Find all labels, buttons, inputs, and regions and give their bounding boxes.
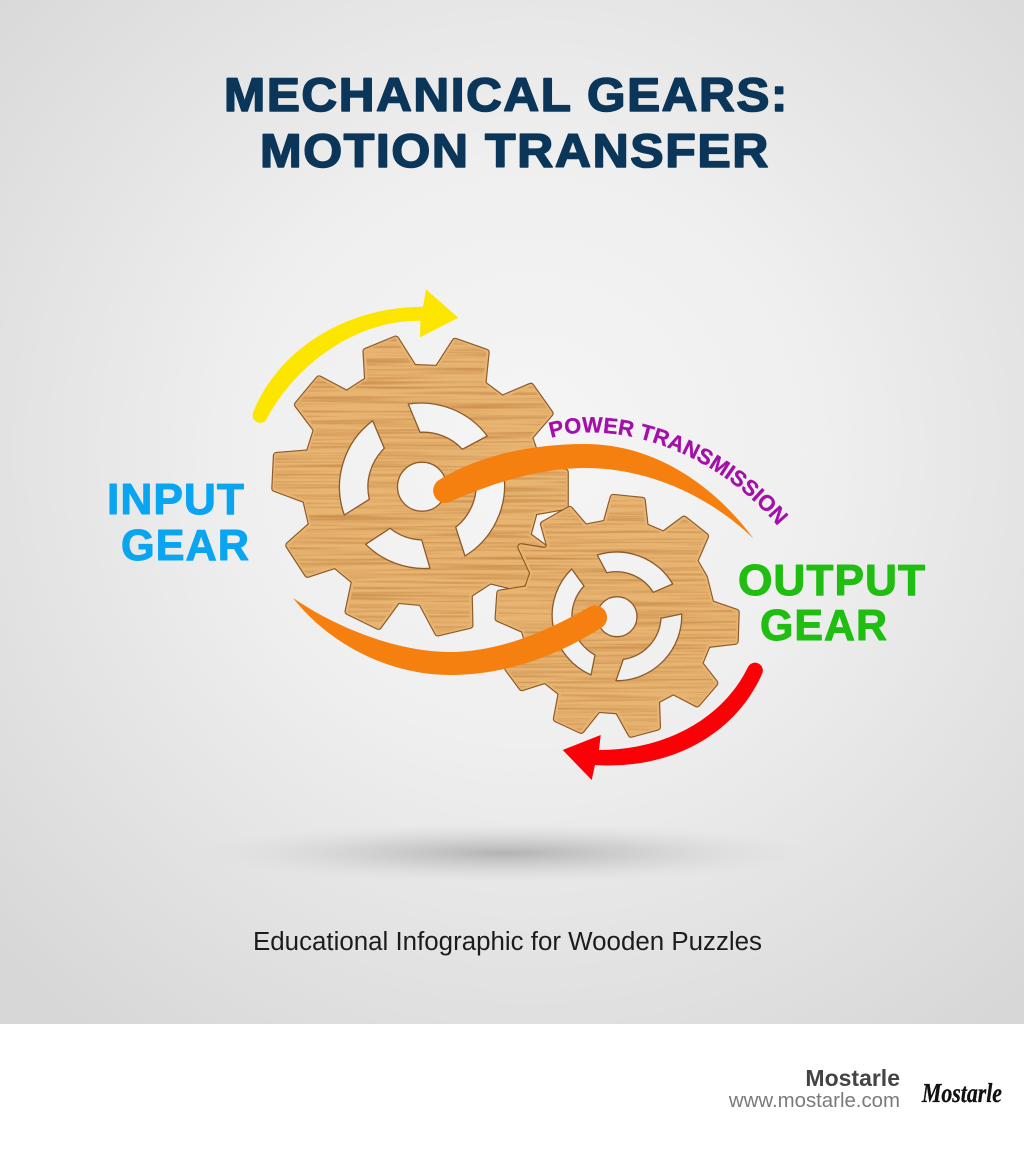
label: input gear — [107, 475, 250, 570]
footer band — [0, 1024, 1024, 1154]
title: MECHANICAL GEARS: — [224, 68, 789, 121]
arrow: upper orange power swoosh — [433, 444, 754, 538]
footer logo: Mostarle — [921, 1078, 1002, 1108]
icon: input gear — [265, 330, 575, 640]
caption: Educational Infographic for Wooden Puzzles — [253, 928, 762, 956]
icon: output gear — [490, 490, 745, 742]
arrow: lower orange power swoosh — [293, 598, 607, 675]
title — [224, 68, 789, 177]
arrow: red counter-clockwise rotation — [563, 663, 763, 780]
footer brand text: Mostarle — [805, 1065, 900, 1091]
arrow: yellow clockwise rotation — [253, 289, 458, 423]
footer brand text: www.mostarle.com — [728, 1090, 900, 1112]
ground shadow — [195, 823, 815, 883]
footer brand text — [728, 1065, 900, 1112]
label: output gear: GEAR — [760, 601, 888, 650]
label: output gear: OUTPUT — [738, 556, 926, 605]
label: power transmission: POWER TRANSMISSION — [548, 417, 788, 526]
title: MOTION TRANSFER — [260, 124, 770, 177]
label: input gear: GEAR — [121, 521, 250, 570]
label: output gear — [738, 556, 926, 650]
label: input gear: INPUT — [107, 475, 245, 524]
